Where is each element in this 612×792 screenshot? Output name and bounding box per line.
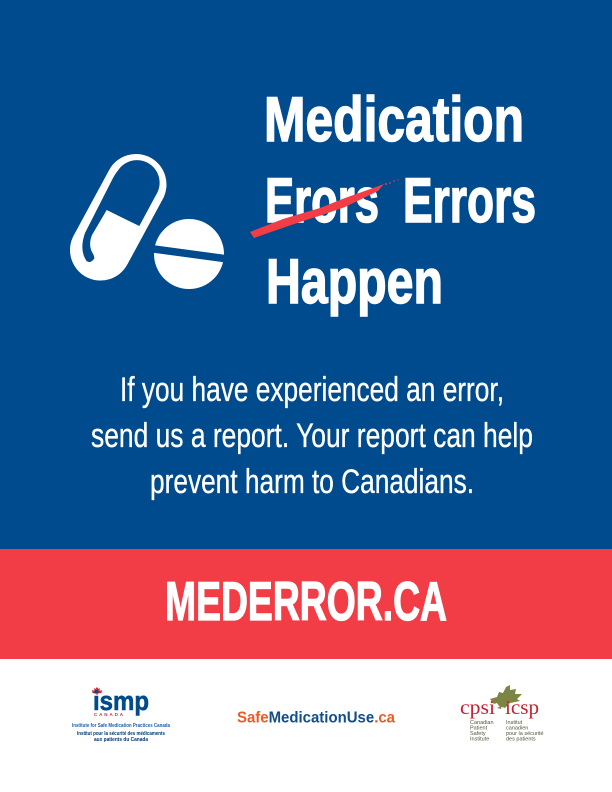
logo: SafeMedicationUse.ca: SafeMedicationUse.ca [237, 710, 395, 726]
URL heading: MEDERROR.CA [165, 571, 447, 632]
logo: ISMP Canada: Institute for Safe Medication Practices Canada [72, 723, 170, 729]
logo: CPSI ICSP: Institute [470, 736, 489, 742]
title: Medication: Medication [264, 85, 524, 155]
icon: capsule pill [82, 160, 160, 262]
body text: If you have experienced an error, [120, 371, 504, 409]
panel: white logo footer [0, 659, 612, 792]
logo: CPSI ICSP: Patient [470, 726, 488, 732]
logo: CPSI ICSP: icsp [505, 697, 539, 719]
logo: ISMP Canada: aux patients du Canada [94, 737, 148, 743]
logo: CPSI ICSP: Canadian [470, 720, 494, 726]
title: misspelled word Erors: Erors [265, 166, 379, 236]
logo: CPSI ICSP: des patients [506, 736, 536, 742]
logo: ISMP Canada [72, 686, 170, 743]
logo: ISMP Canada: Institut pour la sécurité des médicaments [77, 731, 165, 737]
body text: prevent harm to Canadians. [150, 463, 474, 501]
logo: CPSI ICSP: canadien [506, 726, 528, 732]
logo: CPSI ICSP [460, 685, 544, 742]
body text [91, 371, 533, 501]
logo: ISMP Canada: CANADA [94, 712, 124, 717]
logo: CPSI ICSP: Institut [506, 720, 523, 726]
icon: tablet [150, 219, 228, 289]
red strikethrough scribble [250, 179, 399, 238]
logo: ISMP Canada: ismp [93, 686, 149, 716]
logo: CPSI ICSP: pour la sécurité [506, 731, 544, 737]
title: Errors: Errors [403, 166, 536, 236]
logo: CPSI ICSP: cpsi [460, 697, 495, 719]
panel: red URL band [0, 549, 612, 659]
logo: CPSI ICSP: Safety [470, 731, 486, 737]
panel: blue background [0, 0, 612, 549]
title: Happen: Happen [266, 247, 443, 317]
